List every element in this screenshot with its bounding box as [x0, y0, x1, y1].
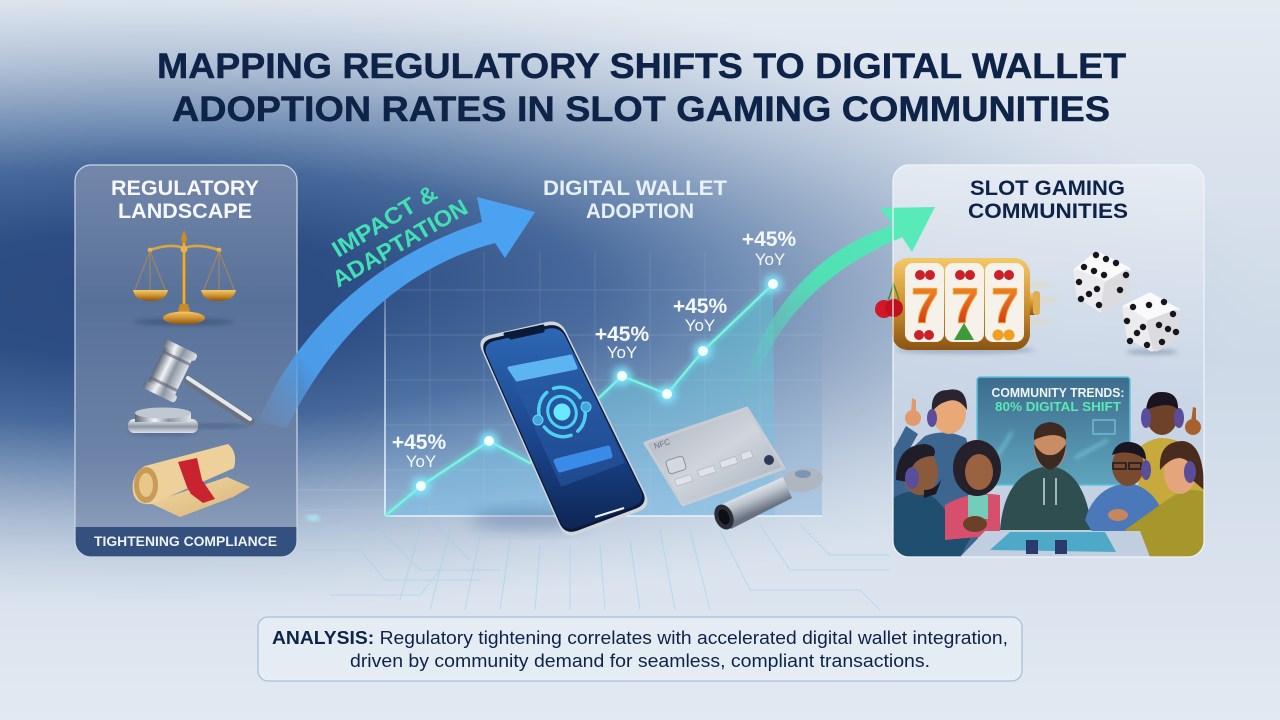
label point 2: +45%	[595, 323, 649, 346]
icon: slot machine	[875, 258, 1056, 354]
callout: analysis: ANALYSIS: Regulatory tightening correlates with accelerated digital wallet integration,	[272, 627, 1008, 648]
title: ADOPTION RATES IN SLOT GAMING COMMUNITIES	[172, 90, 1110, 129]
label point 4: YoY	[755, 250, 785, 269]
panel: regulatory landscape	[75, 165, 297, 557]
chart: digital wallet adoption	[384, 250, 822, 516]
community trends board: 80% DIGITAL SHIFT	[995, 399, 1121, 414]
label point 4	[742, 228, 796, 269]
chart trend line	[385, 275, 782, 516]
person front right	[1108, 441, 1204, 557]
label point 2	[595, 323, 649, 362]
title: MAPPING REGULATORY SHIFTS TO DIGITAL WALLET	[157, 47, 1126, 86]
community trends board	[977, 377, 1130, 485]
reel sevens: 7	[951, 278, 979, 334]
heading: digital wallet adoption	[543, 177, 727, 223]
callout: analysis	[258, 617, 1022, 681]
cherries	[875, 283, 903, 318]
person front left	[893, 444, 972, 557]
panel heading: LANDSCAPE	[118, 200, 252, 223]
label point 3: YoY	[685, 316, 715, 335]
person back left	[893, 389, 978, 557]
arrow label: IMPACT &	[327, 179, 442, 262]
person back right	[1138, 392, 1204, 506]
green arrow	[740, 207, 935, 392]
heading: digital wallet adoption: DIGITAL WALLET	[543, 177, 727, 200]
circuit glow node	[306, 516, 320, 520]
arrow label: ADAPTATION	[328, 194, 472, 292]
icon: nfc card	[645, 408, 784, 505]
panel heading: SLOT GAMING	[970, 177, 1125, 200]
fingerprint	[531, 380, 593, 444]
reel sevens	[911, 278, 1019, 334]
community trends board: COMMUNITY TRENDS:	[992, 385, 1124, 400]
person woman curly hair	[945, 440, 1001, 540]
reel sevens: 7	[991, 278, 1019, 334]
callout: analysis: driven by community demand for seamless, compliant transactions.	[350, 650, 930, 671]
title	[157, 47, 1126, 129]
icon: gavel	[128, 339, 250, 436]
label point 4: +45%	[742, 228, 796, 251]
label point 3	[673, 295, 727, 335]
reel symbols	[914, 270, 1014, 340]
person right with glasses	[1085, 442, 1160, 531]
label point 1: YoY	[406, 452, 436, 471]
panel footer band: TIGHTENING COMPLIANCE	[94, 533, 277, 549]
label point 1	[392, 431, 446, 471]
green arrow head over panel	[880, 207, 935, 252]
icon: metal key fob	[711, 465, 824, 532]
panel footer band	[75, 527, 297, 557]
illustration: community group	[893, 377, 1204, 557]
reel sevens: 7	[911, 278, 939, 334]
label point 1: +45%	[392, 431, 446, 454]
label point 3: +45%	[673, 295, 727, 318]
icon: dice	[1076, 252, 1179, 355]
icon: smartphone	[470, 321, 647, 536]
wallet app card	[508, 354, 623, 485]
panel heading: COMMUNITIES	[968, 200, 1128, 223]
panel heading	[111, 177, 259, 223]
panel heading	[968, 177, 1128, 223]
table with tablet	[960, 531, 1150, 557]
panel: slot gaming communities	[875, 165, 1204, 557]
data labels: year over year growth	[392, 228, 796, 471]
icon: scales of justice	[133, 230, 236, 326]
panel heading: REGULATORY	[111, 177, 259, 200]
label point 2: YoY	[607, 343, 637, 362]
circuit board pattern	[300, 490, 890, 610]
blue arrow: impact and adaptation	[258, 179, 535, 428]
person center man	[1000, 422, 1092, 530]
icon: nfc card: NFC	[653, 437, 671, 451]
chart area fill	[385, 284, 775, 516]
icon: legal scroll	[133, 444, 250, 517]
heading: digital wallet adoption: ADOPTION	[586, 200, 694, 223]
